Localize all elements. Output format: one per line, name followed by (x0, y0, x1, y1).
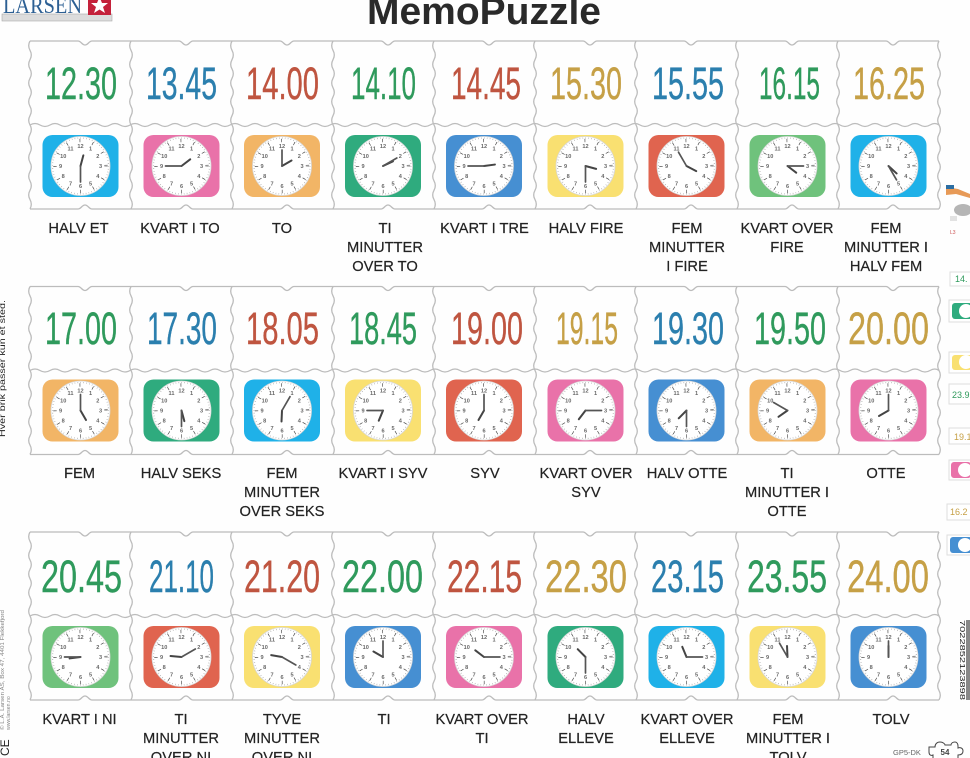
clock 14.10 (345, 135, 421, 197)
label HALV ELLEVE: ELLEVE (558, 731, 614, 747)
panel: row 3 clocks (42, 626, 926, 688)
clock 23.55 (750, 626, 826, 688)
label TI MINUTTER OVER NI: MINUTTER (143, 731, 219, 747)
puzzle frame: row 2 (29, 286, 940, 454)
clock 14.00 (244, 135, 320, 197)
label FEM MINUTTER OVER SEKS: FEM (266, 466, 298, 482)
time 18.45: 18.45 (349, 303, 417, 354)
time 19.50: 19.50 (754, 303, 826, 354)
logo: Larsen (2, 0, 112, 21)
time 22.15: 22.15 (447, 551, 522, 602)
label KVART I TO: KVART I TO (140, 221, 220, 237)
time 19.15: 19.15 (556, 303, 618, 354)
clock 19.30 (648, 380, 724, 442)
clock 14.45 (446, 135, 522, 197)
time 16.25: 16.25 (853, 58, 925, 109)
side note: publisher address: © L.A. Larsen AS, Box 47, 4401 Flekkefjord (0, 610, 6, 730)
time 14.00: 14.00 (246, 58, 319, 109)
label KVART OVER ELLEVE: ELLEVE (659, 731, 715, 747)
label FEM: FEM (64, 466, 95, 482)
time 13.45: 13.45 (146, 58, 217, 109)
label KVART OVER FIRE: FIRE (770, 240, 804, 256)
illustration: hand and puzzle pile (946, 185, 970, 236)
clock 17.30 (144, 380, 220, 442)
panel: row 3 times (41, 551, 929, 602)
clock 16.25 (850, 135, 926, 197)
label FEM MINUTTER I FIRE: FEM (671, 221, 703, 237)
label KVART I NI: KVART I NI (42, 712, 117, 728)
clock 18.45 (345, 380, 421, 442)
time 12.30: 12.30 (45, 58, 117, 109)
time 23.55: 23.55 (747, 551, 827, 602)
clock 22.00 (345, 626, 421, 688)
mini piece: blue clock (947, 535, 970, 555)
panel: row 3 labels (42, 712, 910, 758)
mini piece: 14. (950, 272, 970, 286)
clock 20.00 (850, 380, 926, 442)
time 16.15: 16.15 (759, 58, 820, 109)
panel: row 1 times (45, 58, 925, 109)
mini piece: 14.: 14. (955, 274, 968, 284)
label TI MINUTTER OVER TO: MINUTTER (347, 240, 423, 256)
time 17.30: 17.30 (147, 303, 217, 354)
time 23.15: 23.15 (651, 551, 724, 602)
time 14.10: 14.10 (351, 58, 416, 109)
mini piece: yellow clock (949, 352, 970, 373)
label KVART OVER ELLEVE: KVART OVER (640, 712, 734, 728)
puzzle frame: row 3 (29, 532, 940, 700)
clock 13.45 (144, 135, 220, 197)
time 20.45: 20.45 (41, 551, 122, 602)
label OTTE: OTTE (866, 466, 906, 482)
time 21.10: 21.10 (149, 551, 214, 602)
mini piece: 19.1 (949, 428, 970, 444)
label TI MINUTTER OVER NI: TI (174, 712, 188, 728)
label HALV FIRE: HALV FIRE (549, 221, 624, 237)
clock 17.00 (42, 380, 118, 442)
label FEM MINUTTER I TOLV: MINUTTER I (746, 731, 830, 747)
time 24.00: 24.00 (847, 551, 929, 602)
side note: publisher address: www.larsen.no (6, 696, 12, 730)
panel: row 2 labels (64, 466, 906, 520)
clock 15.30 (548, 135, 624, 197)
label HALV OTTE: HALV OTTE (647, 466, 727, 482)
clock 15.55 (648, 135, 724, 197)
label KVART OVER TI: TI (475, 731, 489, 747)
clock 20.45 (42, 626, 118, 688)
label SYV: SYV (470, 466, 500, 482)
label TOLV: TOLV (872, 712, 910, 728)
time 19.00: 19.00 (451, 303, 523, 354)
icon: puzzle piece count: 54 (941, 748, 950, 757)
clock 22.30 (548, 626, 624, 688)
label TI MINUTTER I OTTE: TI (780, 466, 794, 482)
label KVART I TRE: KVART I TRE (440, 221, 529, 237)
clock 12.30 (42, 135, 118, 197)
panel: row 2 clocks (42, 380, 926, 442)
label HALV SEKS: HALV SEKS (141, 466, 221, 482)
clock 18.05 (244, 380, 320, 442)
clock 21.10 (144, 626, 220, 688)
label TI: TI (377, 712, 391, 728)
label FEM MINUTTER OVER SEKS: OVER SEKS (240, 504, 325, 520)
label FEM MINUTTER I HALV FEM: HALV FEM (850, 259, 922, 275)
label TI MINUTTER OVER TO: OVER TO (352, 259, 418, 275)
mini piece: 16.2: 16.2 (950, 507, 968, 517)
label TYVE MINUTTER OVER NI: TYVE (263, 712, 301, 728)
mini piece: green clock (949, 300, 970, 322)
label FEM MINUTTER I FIRE: I FIRE (666, 259, 708, 275)
panel: row 2 times (45, 303, 929, 354)
panel: row 1 clocks (42, 135, 926, 197)
label FEM MINUTTER I HALV FEM: MINUTTER I (844, 240, 928, 256)
right edge: instruction pictures (946, 185, 970, 555)
time 22.30: 22.30 (545, 551, 627, 602)
time 17.00: 17.00 (45, 303, 117, 354)
label KVART OVER FIRE: KVART OVER (740, 221, 834, 237)
clock 24.00 (850, 626, 926, 688)
mini piece: 16.2 (947, 504, 970, 520)
label FEM MINUTTER OVER SEKS: MINUTTER (244, 485, 320, 501)
label FEM MINUTTER I TOLV: FEM (772, 712, 804, 728)
clock 19.50 (750, 380, 826, 442)
time 19.30: 19.30 (652, 303, 724, 354)
mini piece: pink clock (949, 460, 970, 480)
label TO: TO (272, 221, 292, 237)
label FEM MINUTTER I HALV FEM: FEM (870, 221, 902, 237)
label KVART OVER SYV: KVART OVER (539, 466, 633, 482)
time 18.05: 18.05 (246, 303, 319, 354)
clock 19.15 (548, 380, 624, 442)
label FEM MINUTTER I FIRE: MINUTTER (649, 240, 725, 256)
mini piece: 23.9: 23.9 (952, 390, 970, 400)
time 22.00: 22.00 (342, 551, 423, 602)
panel: row 1 labels (48, 221, 928, 275)
time 14.45: 14.45 (451, 58, 521, 109)
label HALV ET: HALV ET (48, 221, 109, 237)
time 20.00: 20.00 (848, 303, 929, 354)
label TI MINUTTER I OTTE: OTTE (767, 504, 807, 520)
label KVART OVER TI: KVART OVER (435, 712, 529, 728)
label KVART I SYV: KVART I SYV (339, 466, 428, 482)
clock 16.15 (750, 135, 826, 197)
clock 21.20 (244, 626, 320, 688)
label TI MINUTTER I OTTE: MINUTTER I (745, 485, 829, 501)
icon: puzzle piece count (929, 742, 963, 758)
clock 22.15 (446, 626, 522, 688)
puzzle frame: row 1 (29, 41, 940, 209)
time 15.55: 15.55 (652, 58, 724, 109)
label TYVE MINUTTER OVER NI: MINUTTER (244, 731, 320, 747)
clock 23.15 (648, 626, 724, 688)
label HALV ELLEVE: HALV (567, 712, 605, 728)
product code: GP5-DK (893, 748, 921, 757)
barcode (958, 620, 970, 700)
time 21.20: 21.20 (244, 551, 320, 602)
barcode: 7022852123898 (958, 620, 967, 700)
clock 19.00 (446, 380, 522, 442)
illustration: hand and puzzle pile: L3 (950, 230, 956, 236)
label TI MINUTTER OVER TO: TI (378, 221, 392, 237)
label KVART OVER SYV: SYV (571, 485, 601, 501)
time 15.30: 15.30 (550, 58, 622, 109)
mini piece: 23.9 (949, 384, 970, 404)
